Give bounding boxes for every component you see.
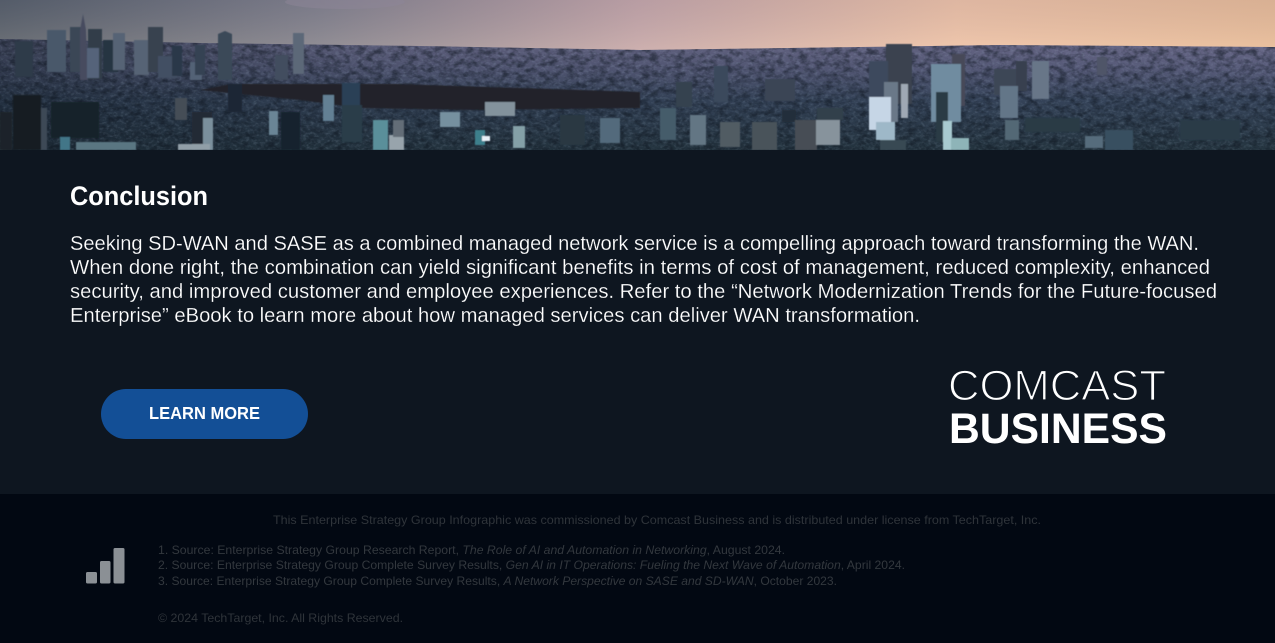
city ground — [0, 39, 1275, 150]
towers, right — [676, 44, 1107, 142]
logo: Comcast Business: BUSINESS — [949, 405, 1167, 453]
footer panel — [0, 494, 1275, 643]
distant towers, left — [15, 14, 304, 80]
city texture — [0, 39, 1275, 150]
source notes: 1. Source: Enterprise Strategy Group Research Report, The Role of AI and Automation in Networking , August 2024. — [158, 543, 785, 557]
source notes: 2. Source: Enterprise Strategy Group Complete Survey Results, Gen AI in IT Operations: Fueling the Next Wave of Automation , April 2024. — [158, 558, 905, 572]
icon: signal bars — [86, 548, 124, 584]
source notes: 3. Source: Enterprise Strategy Group Complete Survey Results, A Network Perspective on SASE and SD-WAN, October 2023. — [158, 574, 837, 588]
header photo: city skyline at dusk — [0, 0, 1275, 150]
conclusion body text: Seeking SD-WAN and SASE as a combined managed network service is a compelling approach toward transforming the WAN. — [70, 233, 1199, 255]
button: Learn More — [101, 389, 308, 439]
foreground buildings, right — [660, 97, 1240, 150]
copyright: © 2024 TechTarget, Inc. All Rights Reserved. — [158, 611, 403, 625]
dark park band — [200, 84, 640, 110]
sky — [0, 0, 1275, 52]
conclusion body text — [70, 233, 1217, 327]
source notes — [158, 543, 905, 588]
conclusion body text: Enterprise” eBook to learn more about how managed services can deliver WAN transformation. — [70, 305, 920, 327]
foreground buildings, left — [0, 83, 620, 150]
skyline buildings — [0, 14, 1240, 150]
conclusion body text: security, and improved customer and employee experiences. Refer to the “Network Modernization Trends for the Future-focused — [70, 281, 1217, 303]
button: Learn More: LEARN MORE — [149, 403, 260, 423]
main dark background panel — [0, 150, 1275, 494]
license statement: This Enterprise Strategy Group Infographic was commissioned by Comcast Business and is distributed under license from TechTarget, Inc. — [273, 513, 1041, 527]
logo: Comcast Business — [948, 362, 1167, 453]
conclusion body text: When done right, the combination can yield significant benefits in terms of cost of management, reduced complexity, enhanced — [70, 257, 1210, 279]
logo: Comcast Business: COMCAST — [948, 362, 1166, 410]
heading: Conclusion: Conclusion — [70, 181, 208, 211]
